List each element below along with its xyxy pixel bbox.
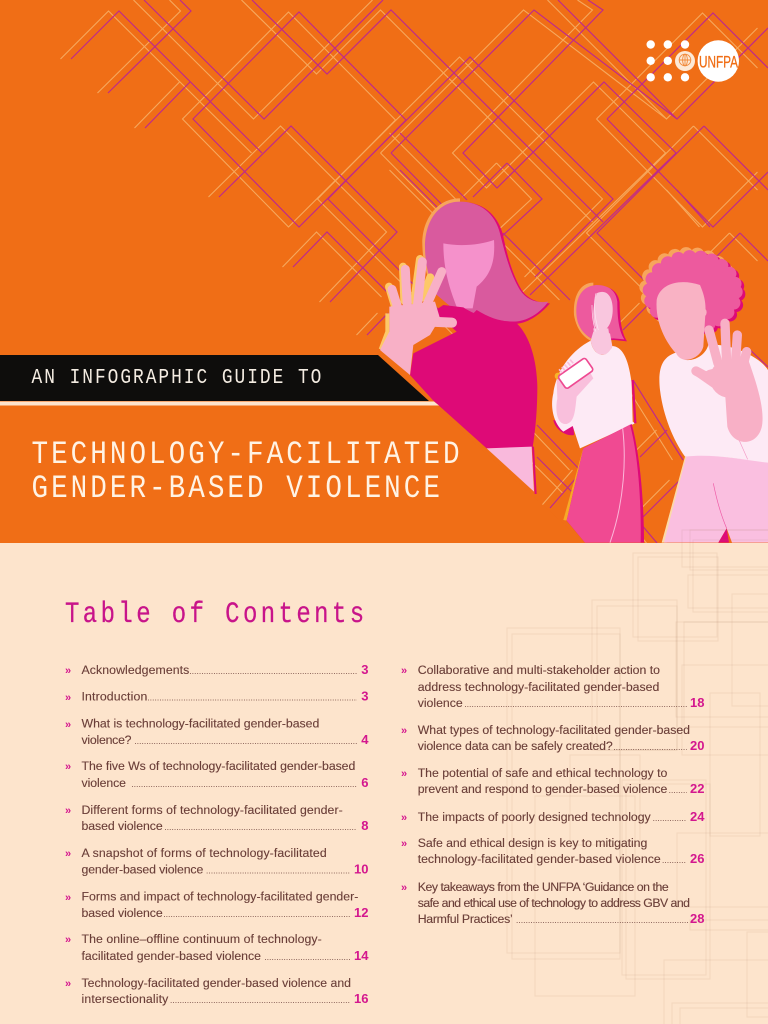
entry: introduction xyxy=(65,689,368,704)
lattice line pattern xyxy=(60,0,768,543)
entry: intersectionality: 16 xyxy=(354,991,368,1006)
entry: a snapshot: A snapshot of forms of technology-facilitated xyxy=(82,846,327,860)
entry: a snapshot: gender-based violence xyxy=(82,862,203,876)
entry: a snapshot: 10 xyxy=(354,862,368,876)
entry: safe and ethical design: » xyxy=(401,838,407,850)
entry: online-offline continuum: The online–offline continuum of technology- xyxy=(82,932,322,946)
entry: forms and impact: Forms and impact of technology-facilitated gender- xyxy=(82,890,358,904)
entry: different forms: based violence xyxy=(82,819,163,833)
entry: forms and impact xyxy=(65,890,368,920)
entry: forms and impact: 12 xyxy=(354,905,368,920)
figure: left woman with raised hand xyxy=(380,198,550,494)
entry: the five ws: The five Ws of technology-facilitated gender-based xyxy=(82,759,355,773)
entry: key takeaways: 28 xyxy=(690,911,704,926)
banner: an infographic guide to: AN INFOGRAPHIC GUIDE TO xyxy=(32,366,323,389)
entry: data types xyxy=(401,723,704,753)
entry: different forms: » xyxy=(65,805,71,817)
entry: impacts of poor design: The impacts of poorly designed technology xyxy=(418,810,652,824)
entry: data types: violence data can be safely created? xyxy=(418,739,613,753)
entry: safe and ethical design: technology-facilitated gender-based violence xyxy=(418,852,661,866)
logo: UNFPA xyxy=(646,40,739,82)
entry: data types: 20 xyxy=(690,738,704,753)
entry: the five ws: » xyxy=(65,761,71,773)
entry: intersectionality: Technology-facilitated gender-based violence and xyxy=(82,976,351,990)
entry: online-offline continuum: facilitated gender-based violence xyxy=(82,949,261,963)
entry: what is tfgbv xyxy=(65,717,369,747)
entry: collaborative action xyxy=(401,663,704,710)
entry: safe and ethical design: Safe and ethical design is key to mitigating xyxy=(418,836,647,850)
entry: data types: » xyxy=(401,725,407,737)
entry: different forms: 8 xyxy=(361,818,368,833)
illustration: three women xyxy=(380,198,768,543)
banner: an infographic guide to xyxy=(0,355,439,406)
entry: potential of technology xyxy=(401,766,704,796)
entry: what is tfgbv: » xyxy=(65,719,71,731)
entry: what is tfgbv: violence? xyxy=(82,733,132,747)
entry: the five ws: violence xyxy=(82,776,126,790)
orange diagonal panel xyxy=(0,356,585,543)
entry: potential of technology: The potential of safe and ethical technology to xyxy=(418,766,667,780)
entry: key takeaways: Harmful Practices’ xyxy=(418,912,513,926)
figure: centre woman with phone xyxy=(552,283,644,543)
entry: safe and ethical design xyxy=(401,836,704,866)
entry: online-offline continuum: 14 xyxy=(354,948,369,963)
entry: key takeaways: » xyxy=(401,882,407,894)
entry: potential of technology: prevent and respond to gender-based violence xyxy=(418,782,667,796)
entry: intersectionality: » xyxy=(65,978,71,990)
entry: online-offline continuum xyxy=(65,932,369,963)
figure: right woman with raised hand xyxy=(646,254,768,543)
entry: different forms xyxy=(65,803,368,833)
entry: collaborative action: » xyxy=(401,665,407,677)
entry: what is tfgbv: What is technology-facilitated gender-based xyxy=(82,717,319,731)
entry: intersectionality xyxy=(65,976,368,1006)
entry: safe and ethical design: 26 xyxy=(690,851,704,866)
entry: collaborative action: violence xyxy=(418,696,463,710)
entry: collaborative action: 18 xyxy=(690,695,704,710)
entry: collaborative action: address technology-facilitated gender-based xyxy=(418,680,659,694)
entry: introduction: Introduction xyxy=(82,690,147,704)
entry: impacts of poor design: 24 xyxy=(690,809,705,824)
cover background xyxy=(0,0,768,543)
entry: online-offline continuum: » xyxy=(65,934,71,946)
entry: the five ws xyxy=(65,759,368,790)
entry: potential of technology: 22 xyxy=(690,781,704,796)
entry: impacts of poor design: » xyxy=(401,812,407,824)
title: GENDER-BASED VIOLENCE xyxy=(32,471,443,508)
entry: forms and impact: based violence xyxy=(82,906,163,920)
entry: acknowledgements: » xyxy=(65,665,71,677)
entry: acknowledgements: Acknowledgements xyxy=(82,663,189,677)
title xyxy=(32,437,463,508)
entry: key takeaways: Key takeaways from the UNFPA ‘Guidance on the xyxy=(418,880,669,894)
entry: the five ws: 6 xyxy=(361,775,368,790)
entry: forms and impact: » xyxy=(65,892,71,904)
logo: UNFPA: UNFPA xyxy=(699,52,738,72)
entry: acknowledgements: 3 xyxy=(361,662,368,677)
entry: introduction: 3 xyxy=(361,689,368,704)
entry: intersectionality: intersectionality xyxy=(82,992,169,1006)
heading: table of contents: Table of Contents xyxy=(65,598,368,632)
column: left contents list xyxy=(65,662,369,1006)
entry: key takeaways: safe and ethical use of technology to address GBV and xyxy=(418,896,690,910)
entry: collaborative action: Collaborative and multi-stakeholder action to xyxy=(418,663,660,677)
entry: different forms: Different forms of technology-facilitated gender- xyxy=(82,803,343,817)
entry: a snapshot xyxy=(65,846,368,876)
entry: key takeaways xyxy=(401,880,704,926)
column: right contents list xyxy=(401,663,705,926)
entry: introduction: » xyxy=(65,692,71,704)
faint rectangle pattern xyxy=(507,530,768,1024)
entry: data types: What types of technology-facilitated gender-based xyxy=(418,723,690,737)
entry: what is tfgbv: 4 xyxy=(361,732,369,747)
title: TECHNOLOGY-FACILITATED xyxy=(32,437,463,474)
entry: potential of technology: » xyxy=(401,768,407,780)
entry: a snapshot: » xyxy=(65,848,71,860)
entry: acknowledgements xyxy=(65,662,368,677)
